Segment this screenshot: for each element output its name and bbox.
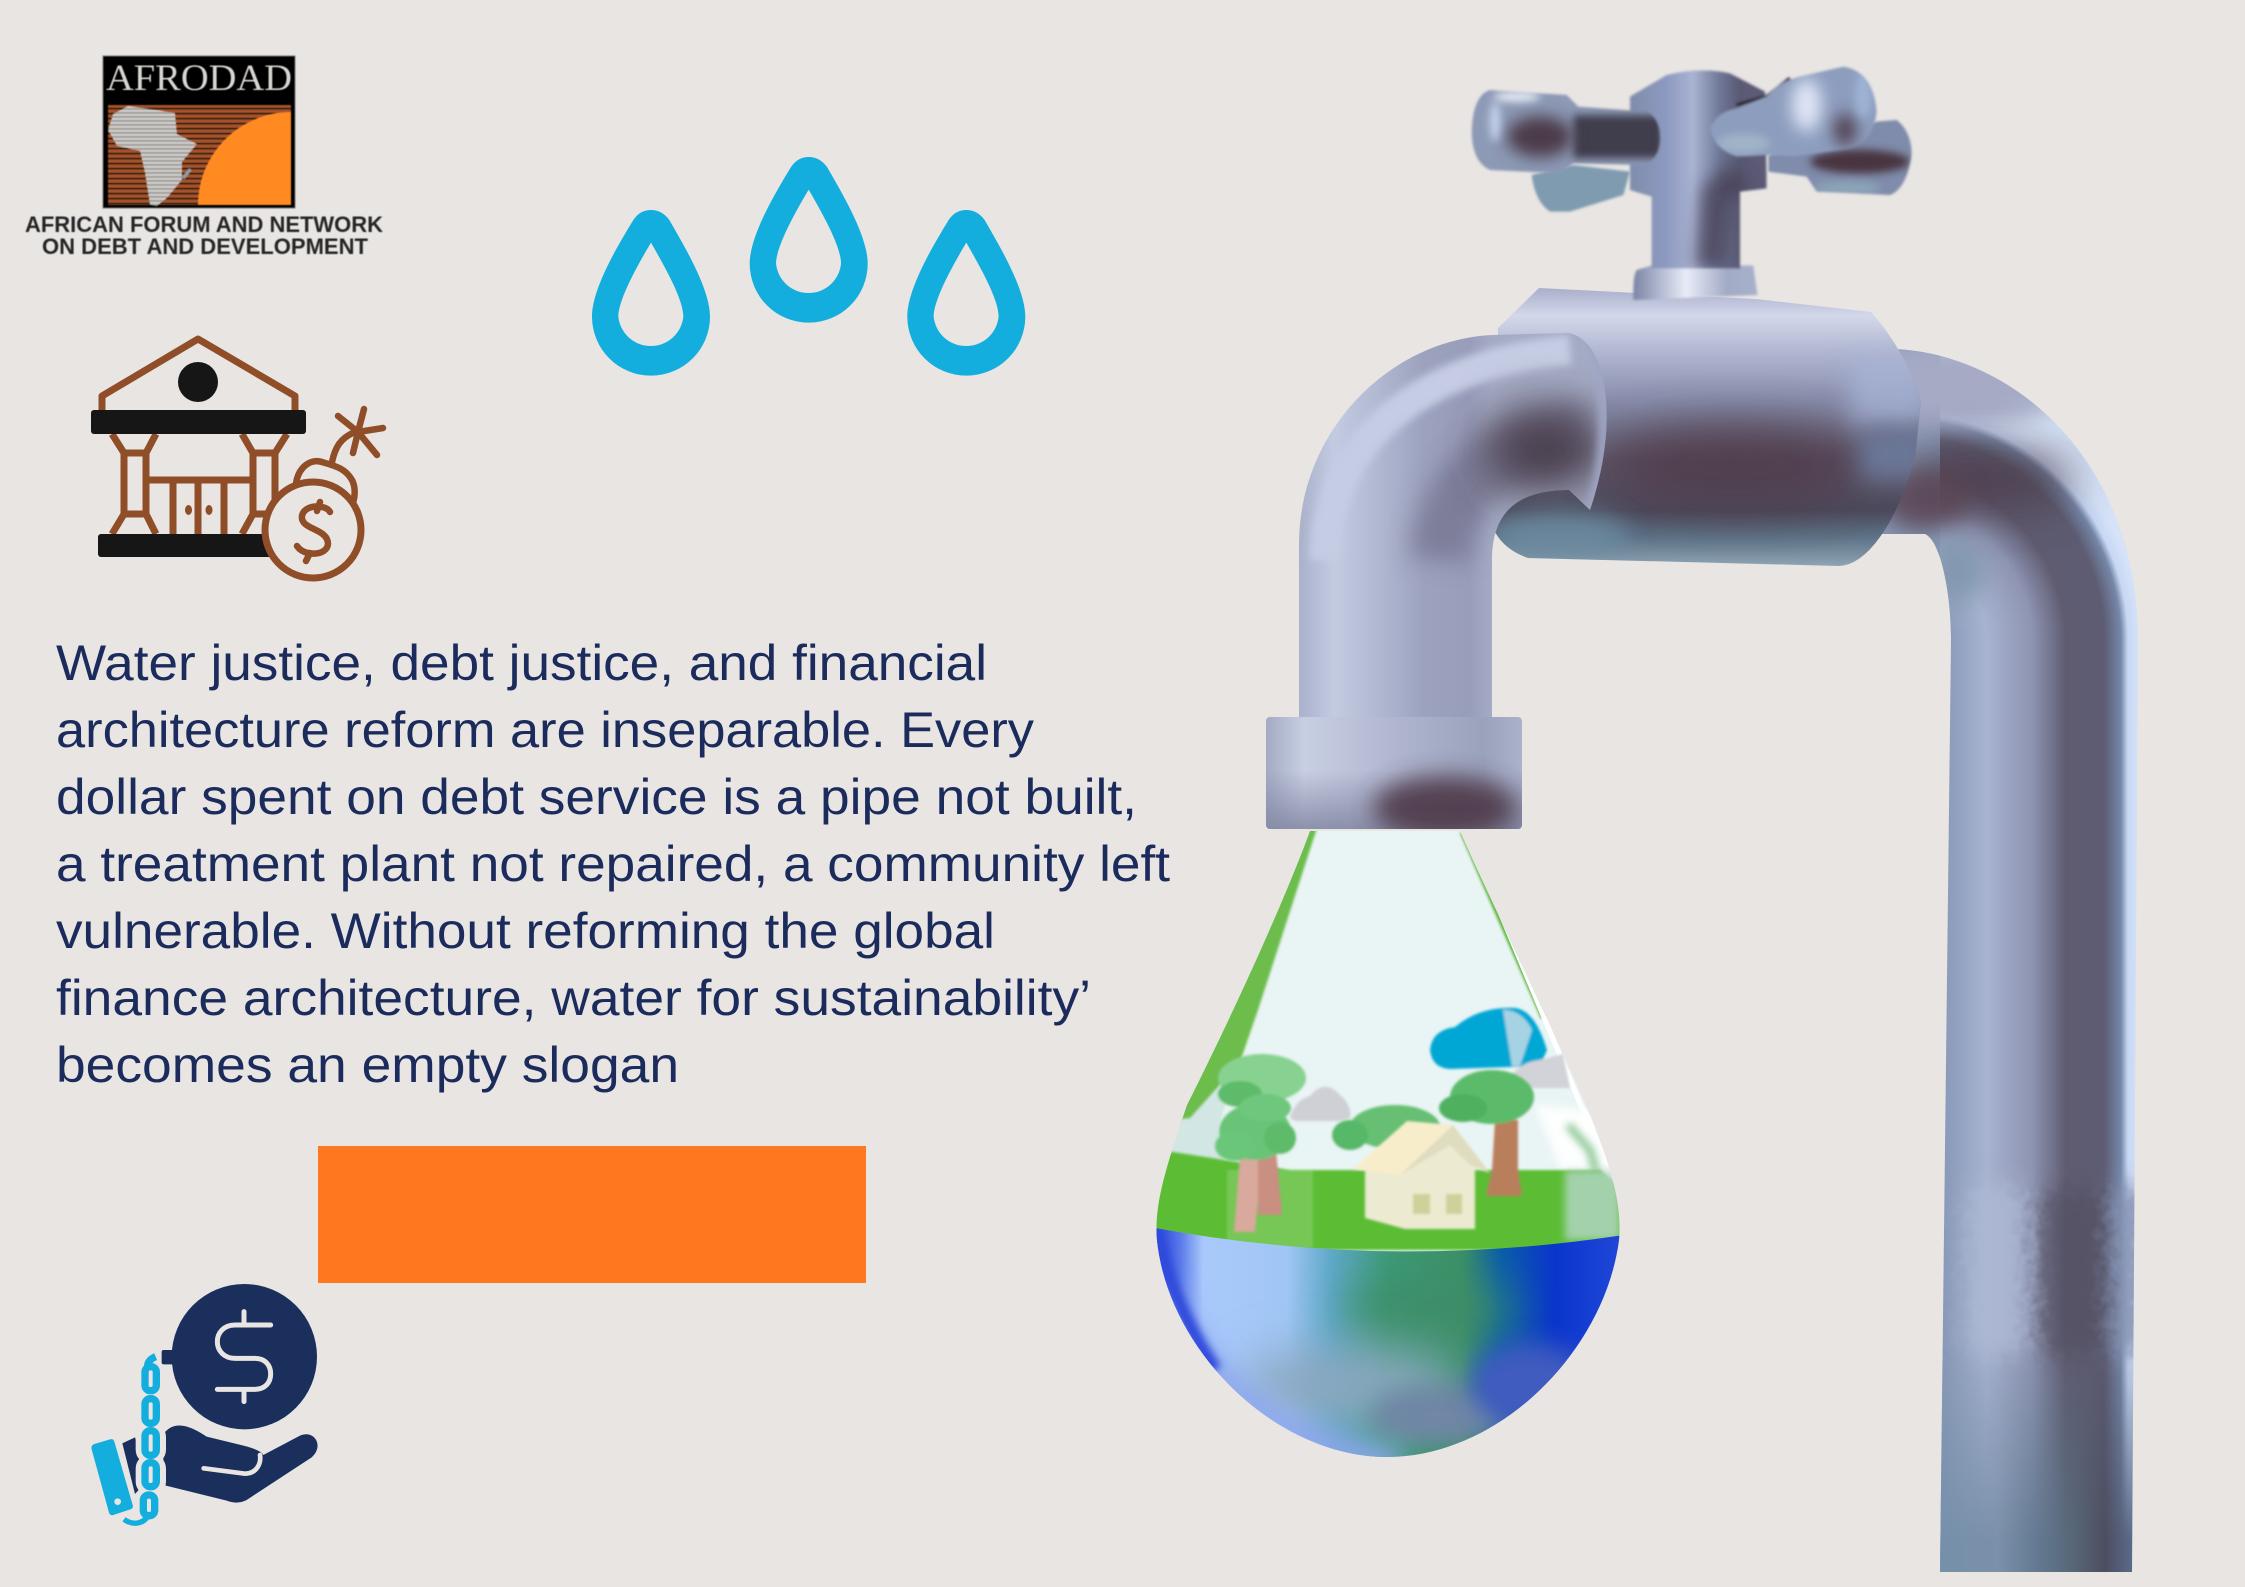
glass sky: [1221, 831, 1588, 1252]
logo caption: [25, 212, 383, 259]
icon: hand with chained dollar ball: [91, 1284, 318, 1523]
lower left arm: [1532, 165, 1630, 212]
illustration: water tap: [1266, 63, 2160, 1587]
stem base: [1633, 265, 1757, 300]
body text: a treatment plant not repaired, a community left: [56, 836, 1170, 892]
dollar ball: [162, 1284, 317, 1429]
pipe smudge: [1968, 1185, 2144, 1355]
glass rim foliage: [1150, 825, 1620, 1230]
body text: [56, 635, 1170, 1093]
front right arm: [1707, 63, 1880, 160]
logo mark: [102, 54, 296, 210]
ground: [1150, 1150, 1625, 1250]
body text: Water justice, debt justice, and financial: [56, 635, 987, 691]
front left arm: [1470, 87, 1663, 177]
house: [1353, 1121, 1490, 1229]
logo caption: ON DEBT AND DEVELOPMENT: [42, 234, 369, 259]
trees: [1215, 1054, 1534, 1232]
icon: three water drops: [592, 157, 1025, 376]
water: [1150, 1225, 1630, 1465]
chain: [124, 1357, 160, 1523]
handle: [1470, 63, 1917, 272]
logo caption: AFRICAN FORUM AND NETWORK: [25, 212, 383, 237]
tap body: [1490, 285, 1930, 570]
spout collar: [1266, 717, 1522, 840]
hand: [122, 1425, 318, 1503]
body text: finance architecture, water for sustainability’: [56, 970, 1091, 1026]
body text: vulnerable. Without reforming the global: [56, 903, 995, 959]
left elbow: [1299, 333, 1607, 717]
right pipe: [1882, 349, 2138, 1572]
cuff: [91, 1439, 133, 1515]
logo mark: AFRODAD: [106, 58, 292, 99]
body text: dollar spent on debt service is a pipe not built,: [56, 769, 1137, 825]
illustration: water drop with landscape: [1150, 825, 1630, 1465]
body text: architecture reform are inseparable. Every: [56, 702, 1034, 758]
clouds: [1290, 1008, 1570, 1121]
icon: bank with dollar bomb: [91, 339, 383, 578]
body text: becomes an empty slogan: [56, 1037, 679, 1093]
back right arm: [1767, 118, 1914, 196]
hub and stem: [1627, 65, 1770, 272]
orange rectangle: [318, 1146, 866, 1283]
logo: AFRODAD: [25, 54, 384, 255]
